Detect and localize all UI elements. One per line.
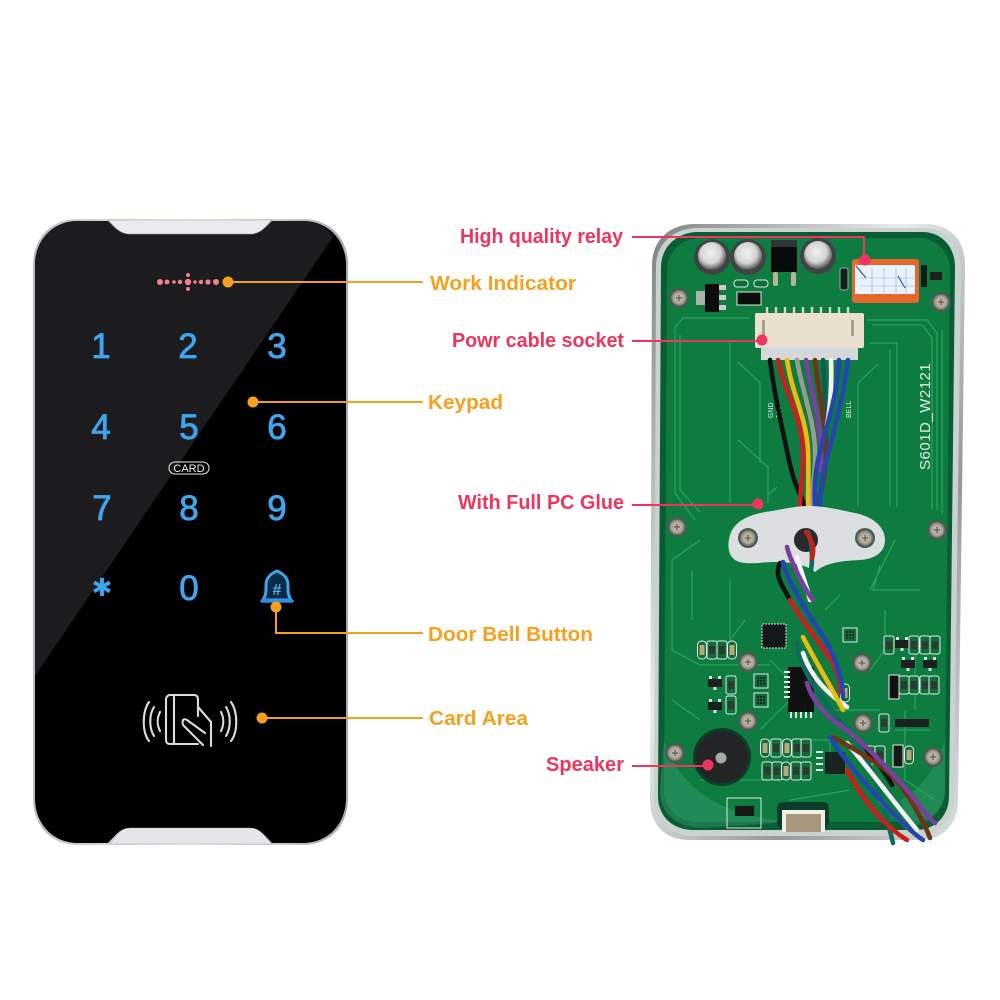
keypad digits: 9 — [267, 489, 287, 528]
keypad digits: 4 — [91, 408, 111, 447]
CARD badge: CARD — [173, 463, 205, 475]
icon: contactless card — [144, 695, 236, 746]
label: Work Indicator: Work Indicator — [430, 273, 576, 295]
socket wires — [770, 360, 848, 505]
keypad digits: 8 — [179, 489, 199, 528]
door bell leader — [270, 602, 423, 633]
callouts: pink leader lines — [632, 237, 870, 770]
keypad digits — [91, 327, 287, 608]
chrome housing — [650, 224, 965, 840]
relay — [852, 259, 919, 303]
keypad leader — [248, 396, 423, 408]
glass reflection — [35, 221, 333, 676]
solder pads and top-row parts — [694, 238, 942, 312]
glue leader — [632, 498, 764, 510]
reset header and bottom clip — [727, 798, 829, 832]
keypad digits: 6 — [267, 408, 287, 447]
keypad digits: ✱ — [92, 573, 112, 602]
twisted cable bundle — [778, 532, 935, 843]
screws — [665, 288, 951, 767]
icon: work indicator LEDs — [157, 273, 219, 291]
black glass face — [35, 221, 346, 843]
relay leader — [632, 237, 870, 266]
label: With Full PC Glue: With Full PC Glue — [458, 492, 624, 514]
icon: door bell with hash: # — [273, 582, 282, 599]
keypad digits: 5 — [179, 408, 199, 447]
wire socket — [755, 307, 864, 360]
metal frame — [33, 219, 348, 845]
panel: PCB back view — [650, 224, 965, 843]
socket leader — [632, 334, 768, 346]
keypad digits: 1 — [91, 327, 111, 366]
label: Speaker: Speaker — [546, 754, 624, 776]
silkscreen labels: S601D_W2121 — [917, 363, 934, 470]
work indicator leader — [222, 276, 423, 288]
panel: keypad device front — [33, 219, 348, 845]
callouts: orange leader lines — [222, 276, 423, 724]
label: High quality relay: High quality relay — [460, 226, 624, 248]
label: Powr cable socket: Powr cable socket — [452, 330, 624, 352]
keypad digits: 7 — [92, 489, 112, 528]
keypad digits: 3 — [267, 327, 287, 366]
label: Card Area: Card Area — [429, 708, 529, 730]
silkscreen labels: BELL — [846, 401, 853, 418]
label: Keypad: Keypad — [428, 392, 503, 414]
bottom metal clip — [110, 828, 272, 844]
keypad digits: 0 — [179, 569, 199, 608]
silkscreen labels: 12V — [776, 405, 783, 418]
label: Door Bell Button: Door Bell Button — [428, 624, 593, 646]
speaker buzzer — [693, 728, 751, 786]
speaker leader — [632, 760, 714, 770]
PCB board — [658, 232, 955, 830]
metal bracket — [728, 506, 885, 572]
card area leader — [256, 712, 423, 724]
lower chips and components — [698, 624, 940, 780]
icon: door bell with hash — [262, 571, 292, 601]
silkscreen labels — [768, 363, 934, 470]
copper traces — [672, 318, 942, 800]
keypad digits: 2 — [178, 327, 198, 366]
top metal clip — [108, 220, 272, 234]
silkscreen labels: GND — [768, 402, 775, 418]
